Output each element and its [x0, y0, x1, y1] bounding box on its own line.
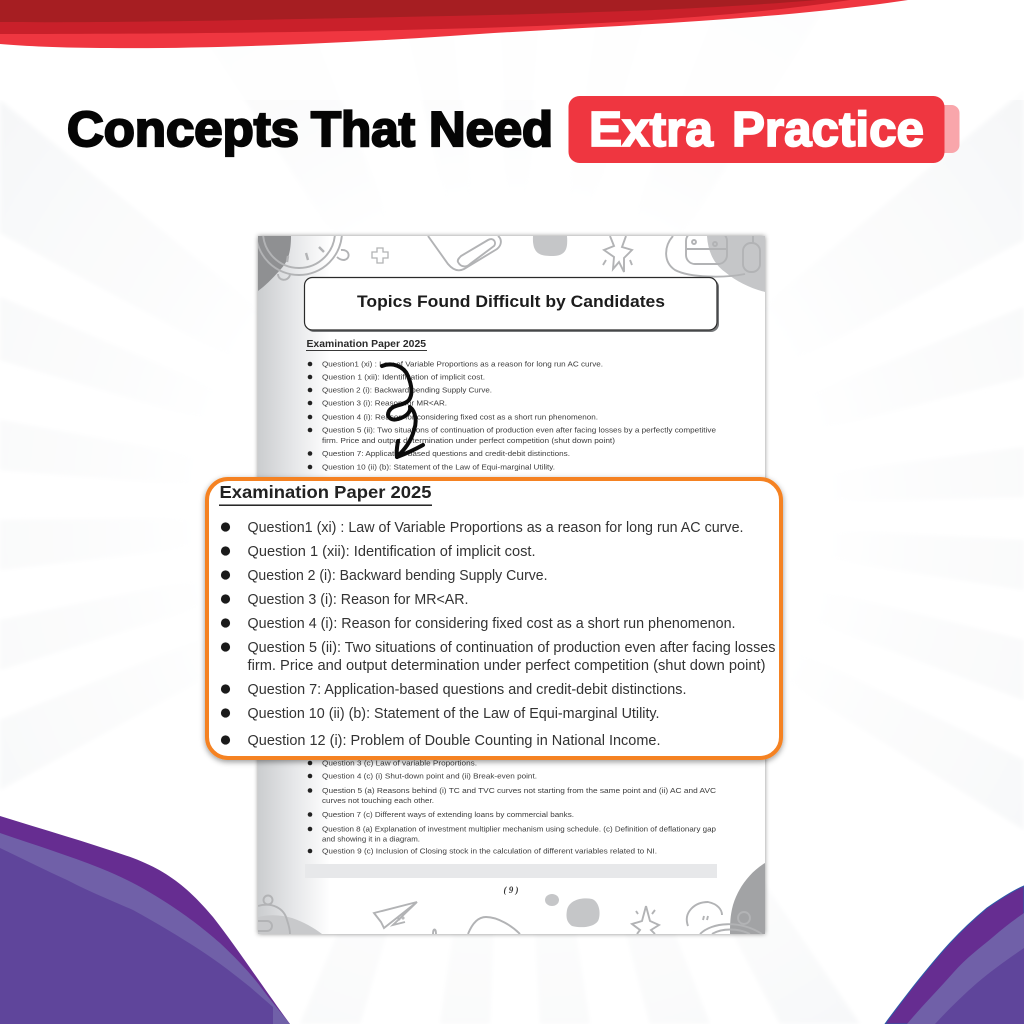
heading: concepts that need: Concepts	[67, 103, 299, 157]
page list: lower questions: and showing it in a diagram.	[322, 834, 420, 844]
page list: upper questions: Question 1 (xii): Identification of implicit cost.	[322, 372, 485, 382]
page list: upper questions: Question 10 (ii) (b): Statement of the Law of Equi-marginal Utility.	[322, 462, 555, 472]
callout list: Question 1 (xii): Identification of implicit cost.	[248, 544, 536, 560]
left purple wave	[0, 816, 290, 1024]
callout list: Question 10 (ii) (b): Statement of the Law of Equi-marginal Utility.	[248, 706, 660, 722]
page list: lower questions: Question 9 (c) Inclusion of Closing stock in the calculation of different variables related to NI.	[322, 846, 657, 856]
heading: extra practice	[589, 103, 924, 157]
panel: book page	[252, 189, 765, 934]
page list: lower questions: Question 7 (c) Different ways of extending loans by commercial banks.	[322, 810, 574, 819]
heading: extra practice: Extra	[589, 103, 714, 157]
pill shadow tab	[900, 105, 960, 153]
page title: Topics Found Difficult by Candidates	[357, 293, 665, 311]
page heading: examination paper: Examination Paper 2025	[306, 338, 426, 350]
callout list: firm. Price and output determination under perfect competition (shut down point)	[248, 658, 766, 674]
page list: lower questions: Question 4 (c) (i) Shut-down point and (ii) Break-even point.	[322, 772, 537, 780]
pill	[568, 96, 944, 163]
heading: concepts that need	[67, 103, 553, 157]
callout list	[221, 520, 775, 749]
callout list: Question 2 (i): Backward bending Supply Curve.	[248, 568, 548, 584]
page doodles	[252, 189, 765, 934]
page list: upper questions: Question 7: Application-based questions and credit-debit distinctions.	[322, 449, 570, 458]
top red swoosh	[0, 0, 908, 48]
page list: lower questions: Question 8 (a) Explanation of investment multiplier mechanism using schedule. (c) Definition of deflationary gap	[322, 824, 716, 834]
page list: upper questions: Question1 (xi) : Law of Variable Proportions as a reason for long run AC curve.	[322, 360, 603, 368]
page footer bar	[305, 864, 717, 878]
page list: upper questions: Question 4 (i): Reason for considering fixed cost as a short run phenomenon.	[322, 412, 598, 422]
heading: extra practice: Practice	[732, 103, 924, 157]
heading: concepts that need: That	[311, 103, 415, 157]
callout list: Question 3 (i): Reason for MR<AR.	[248, 592, 468, 608]
arrow: hand-drawn looping arrow	[382, 364, 423, 457]
page list: lower questions: curves not touching each other.	[322, 796, 434, 805]
right purple wave	[885, 886, 1024, 1024]
callout list: Question 7: Application-based questions and credit-debit distinctions.	[248, 682, 686, 698]
page list: upper questions	[308, 360, 716, 472]
callout list: Question 5 (ii): Two situations of continuation of production even after facing losses	[248, 640, 776, 656]
page list: upper questions: Question 3 (i): Reason for MR<AR.	[322, 398, 447, 408]
heading: concepts that need: Need	[429, 103, 553, 157]
page list: lower questions: Question 3 (c) Law of variable Proportions.	[322, 758, 477, 768]
page title box	[304, 278, 719, 332]
page list: upper questions: Question 2 (i): Backward bending Supply Curve.	[322, 386, 492, 394]
page list: lower questions: Question 5 (a) Reasons behind (i) TC and TVC curves not starting from the same point and (ii) AC and AVC	[322, 786, 717, 795]
callout list: Question 4 (i): Reason for considering fixed cost as a short run phenomenon.	[248, 616, 736, 632]
callout list: Question 12 (i): Problem of Double Counting in National Income.	[248, 733, 660, 749]
callout: zoomed examination paper box	[207, 479, 781, 758]
page list: upper questions: Question 5 (ii): Two situations of continuation of production even after facing losses by a perfectly competitive	[322, 426, 716, 434]
callout list: Question1 (xi) : Law of Variable Proportions as a reason for long run AC curve.	[248, 520, 744, 536]
title	[67, 96, 960, 163]
page number: ( 9 )	[504, 885, 518, 895]
page list: upper questions: firm. Price and output determination under perfect competition (shut down point)	[322, 436, 615, 445]
callout heading: Examination Paper 2025	[220, 482, 432, 502]
page list: lower questions	[308, 758, 717, 856]
